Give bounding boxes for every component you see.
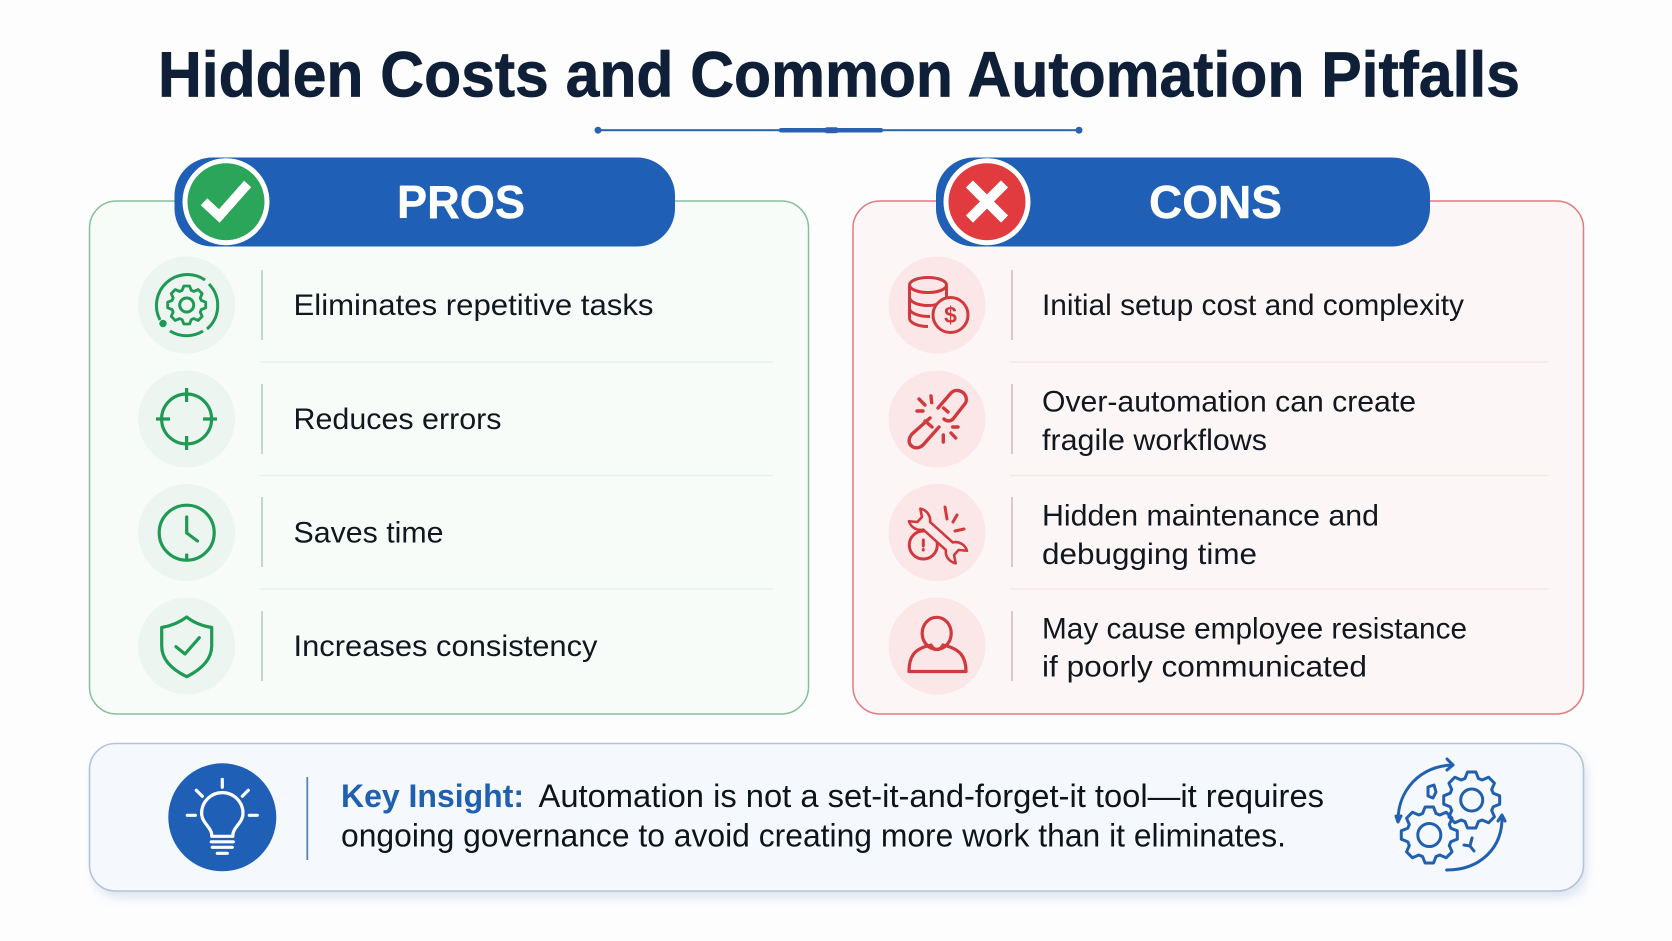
row dividers [1010, 362, 1548, 589]
icon: coin stack with dollar: $ [944, 302, 957, 328]
text: over-automation [1042, 386, 1416, 457]
text: eliminates repetitive tasks: Eliminates repetitive tasks [294, 289, 654, 322]
icon: light bulb [168, 763, 276, 871]
panel: cons [853, 158, 1584, 714]
icon: gears with cycle arrows [1396, 759, 1505, 870]
title underline [594, 127, 1082, 134]
title: Hidden Costs and Common Automation Pitfalls [158, 38, 1520, 110]
text: hidden maintenance [1042, 500, 1379, 571]
cons panel background [853, 201, 1584, 714]
text: reduces errors: Reduces errors [294, 403, 502, 436]
icon: gear with cycle arrows [138, 256, 235, 354]
cons header: CONS [1149, 176, 1282, 228]
text: over-automation: Over-automation can create [1042, 386, 1416, 418]
text: initial setup cost: Initial setup cost and complexity [1042, 289, 1464, 322]
pros panel background [90, 201, 808, 714]
row dividers [260, 362, 773, 589]
text: over-automation: fragile workflows [1042, 424, 1267, 457]
text: increases consistency: Increases consistency [294, 630, 598, 663]
key insight box [90, 744, 1587, 898]
cons header [936, 158, 1430, 246]
text: hidden maintenance: Hidden maintenance and [1042, 500, 1379, 532]
icon: crosshair target [138, 370, 235, 468]
icon: broken chain link [888, 370, 986, 468]
insight text: Automation is not a set-it-and-forget-it tool—it requires [538, 778, 1324, 814]
icon: shield with check [138, 598, 235, 694]
insight text [341, 778, 1324, 854]
vertical separators [1011, 270, 1013, 681]
text: hidden maintenance: debugging time [1042, 538, 1257, 571]
vertical separators [261, 270, 263, 681]
insight text: Key Insight: [341, 778, 524, 814]
text: employee resistance: if poorly communicated [1042, 650, 1367, 684]
icon: clock [138, 484, 235, 581]
text: employee resistance: May cause employee resistance [1042, 612, 1467, 646]
divider [306, 777, 308, 860]
text: saves time: Saves time [294, 516, 444, 550]
text: employee resistance [1042, 612, 1467, 684]
panel: key insight [90, 744, 1587, 898]
icon: wrench and stopwatch [888, 484, 986, 581]
icon: coin stack with dollar [888, 256, 986, 354]
panel: pros [90, 158, 808, 714]
pros header [174, 158, 675, 246]
insight text: ongoing governance to avoid creating more work than it eliminates. [341, 818, 1286, 854]
icon: person [888, 598, 986, 694]
pros header: PROS [397, 176, 525, 228]
